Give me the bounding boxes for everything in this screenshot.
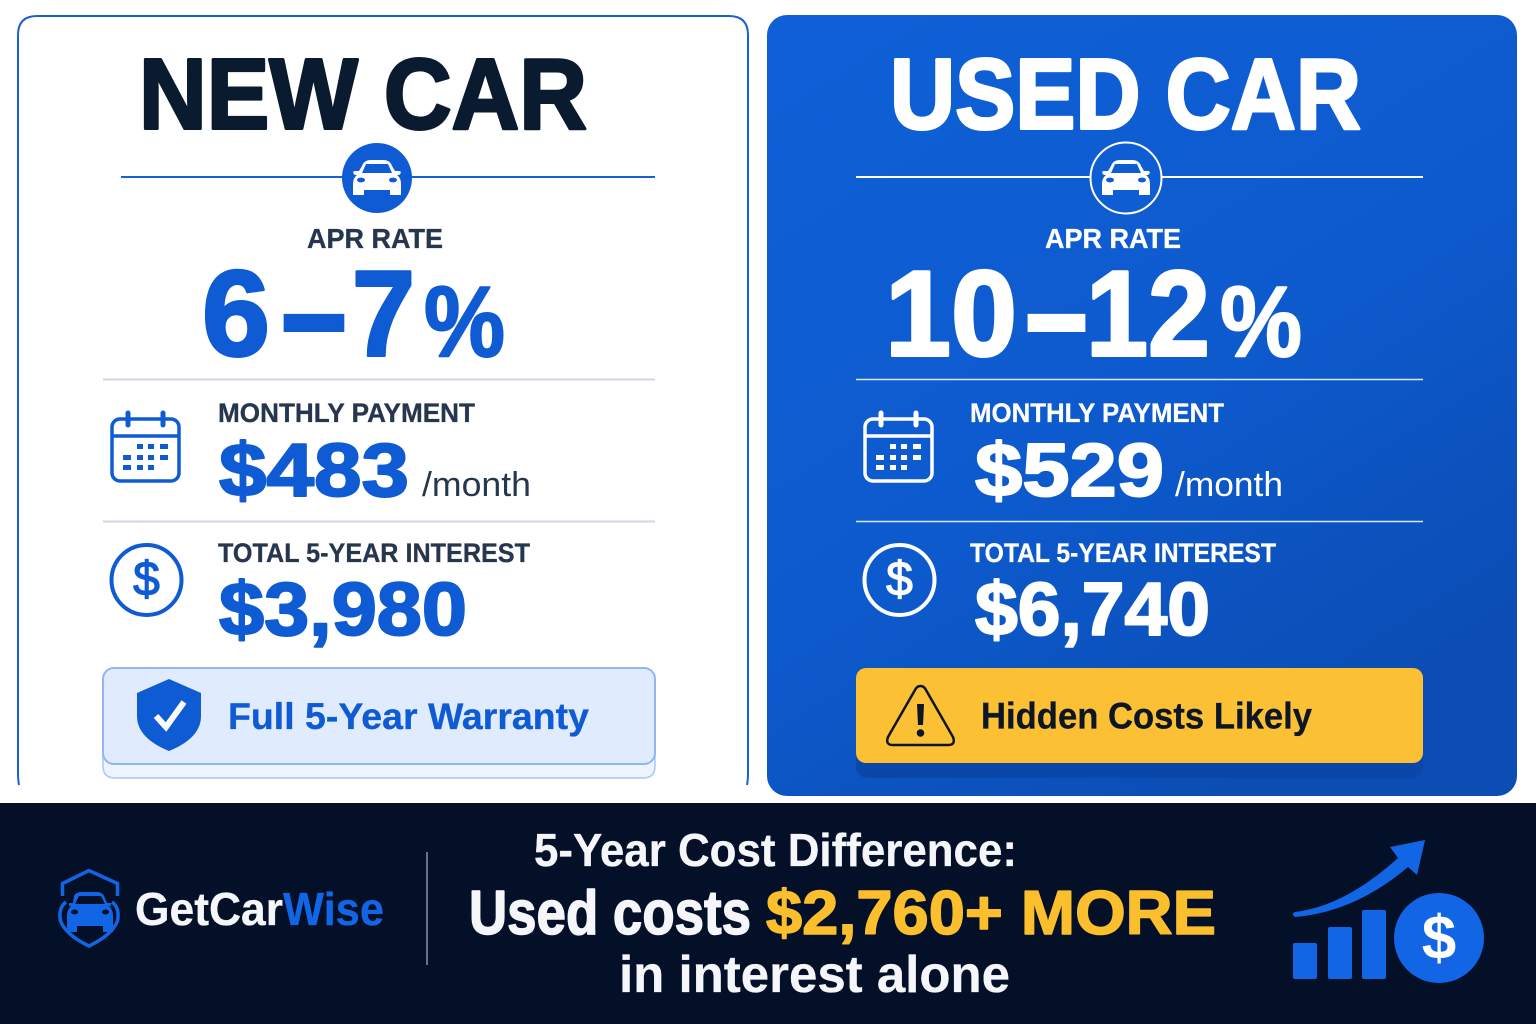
wordmark: Wise (283, 883, 384, 935)
line: used costs more (469, 879, 1216, 948)
value: apr 6-7%: 7 (352, 246, 415, 382)
icon: car badge (342, 143, 412, 213)
value: apr 10-12%: – (1027, 246, 1086, 382)
value: apr 10-12% (885, 246, 1302, 382)
icon: calendar (865, 413, 932, 481)
line: cost difference: 5-Year Cost Difference: (534, 824, 1017, 876)
icon: dollar circle (864, 545, 934, 615)
icon: rising cost chart: $ (1422, 904, 1456, 973)
wordmark: GetCar (135, 883, 283, 935)
heading: used car: USED CAR (890, 38, 1361, 150)
value: monthly payment: $483 (219, 428, 409, 512)
label: apr rate: APR RATE (307, 223, 443, 254)
icon: dollar circle: $ (133, 553, 160, 606)
panel background (767, 15, 1517, 796)
value: total interest: $6,740 (975, 567, 1210, 651)
icon: dollar circle (112, 545, 182, 615)
value: apr 10-12%: 12 (1086, 246, 1210, 382)
line: in interest alone: in interest alone (619, 946, 1010, 1004)
label: total interest: TOTAL 5-YEAR INTEREST (218, 538, 530, 568)
icon: shield car (60, 870, 118, 946)
callout: hidden costs (856, 668, 1423, 778)
label: apr rate: APR RATE (1045, 223, 1181, 254)
wordmark (135, 883, 384, 935)
heading rule (856, 176, 1423, 178)
panel outline (18, 16, 748, 785)
value: total interest: $3,980 (219, 567, 467, 651)
summary text (469, 824, 1216, 1004)
value: apr 6-7%: 6 (202, 246, 270, 382)
unit: per month: /month (1175, 466, 1283, 504)
logo: getcarwise (60, 870, 384, 946)
icon: warning triangle (887, 686, 954, 745)
value: apr 6-7%: – (283, 246, 345, 382)
panel: used car (767, 15, 1517, 796)
heading: new car: NEW CAR (139, 38, 587, 150)
callout text: Full 5-Year Warranty (228, 696, 589, 737)
panel: new car (18, 16, 748, 785)
line: used costs more: $2,760+ MORE (766, 879, 1216, 948)
callout: warranty (103, 668, 655, 778)
value: apr 6-7%: % (424, 266, 505, 378)
icon: rising cost chart (1293, 840, 1484, 983)
callout text: Hidden Costs Likely (981, 696, 1312, 736)
label: monthly payment: MONTHLY PAYMENT (218, 398, 475, 428)
value: apr 6-7% (202, 246, 505, 382)
value: monthly payment: $529 (975, 428, 1164, 512)
icon: shield check (137, 679, 201, 751)
footer band (0, 803, 1536, 1024)
line: used costs more: Used costs (469, 879, 751, 948)
icon: car badge (1090, 142, 1162, 214)
value: apr 10-12%: % (1220, 266, 1302, 378)
label: total interest: TOTAL 5-YEAR INTEREST (970, 538, 1276, 568)
unit: per month: /month (422, 466, 531, 504)
value: apr 10-12%: 10 (885, 246, 1017, 382)
heading rule (121, 176, 655, 178)
icon: calendar (112, 413, 179, 481)
label: monthly payment: MONTHLY PAYMENT (970, 398, 1224, 428)
icon: dollar circle: $ (886, 553, 913, 606)
